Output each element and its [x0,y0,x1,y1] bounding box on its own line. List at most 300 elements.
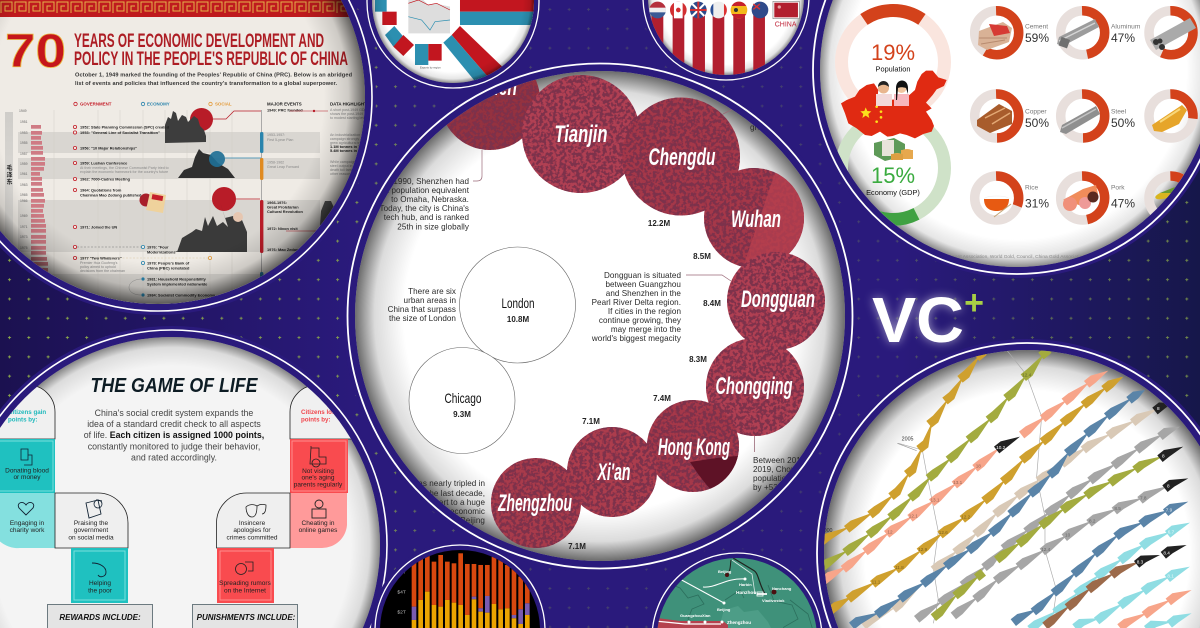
left leader column: 毛 [6,164,13,172]
small caption: Exports by region [420,65,441,69]
note: Dongguan: If cities in the region [608,307,681,316]
grey timeline bands [18,132,320,314]
column headings: SOCIAL [215,102,232,106]
left leader column: 东 [6,178,13,186]
year labels: 1966 [20,199,28,203]
axis labels: $2T [397,609,406,615]
note: Dongguan: continue growing, they [599,316,682,325]
place labels: Xian [702,613,711,618]
place labels: Vladivostok [762,598,785,603]
note: Zhengzhou: the last decade, [427,489,485,498]
left leader column [5,112,13,245]
population values: 12.2M [648,219,670,228]
note: Chongqing [753,436,821,492]
note: Zhengzhou: thanks in part to a huge [399,498,485,507]
logo: VC+: + [964,284,984,322]
square: donating blood: or money [13,474,41,481]
government events: decisions from the chairman [80,269,125,273]
city: Zhengzhou [491,458,581,548]
circle: Chicago: Chicago [444,390,482,406]
square: cheating online [290,493,347,548]
darts: black [994,402,1188,568]
value labels on black darts: 10.2 [996,445,1006,450]
economy events: 1984: Socialist Commodity Economy [147,292,216,298]
city: Dongguan [727,252,825,350]
darts: olive lower [931,456,1163,621]
intro text: October 1, 1949 marked the founding of the Peoples' Republic of China (PRC). Below is an abridged [75,72,353,78]
year labels: 1951 [20,120,28,124]
column headings: MAJOR EVENTS [267,102,302,106]
note: Zhengzhou: The economy has nearly tripled in [362,479,485,488]
note: Shenzhen: In 1990, Shenzhen had [384,177,469,186]
commodity labels: Copper [1025,108,1047,116]
gain header square: points by: [8,416,38,424]
column headings: DATA HIGHLIGHTS [330,102,370,106]
data highlights: A short post-1949 GDP data [330,108,375,112]
red bars [652,10,765,80]
note: Chengdu: greater [750,123,776,132]
year label 2005: 2005 [902,437,914,443]
city: Tianjin [522,75,640,193]
major events: Great Leap Forward [267,165,299,169]
note: Chongqing: by +53% [753,483,785,492]
square: helping the poor: the poor [88,588,113,594]
commodity labels: 47% [1111,196,1135,210]
commodity labels: 59% [1025,31,1049,45]
note: six urban areas: urban areas in [404,296,456,305]
place labels: Harbin [739,582,752,587]
place labels: Zhengzhou [727,620,751,625]
place labels: Beijing [717,607,731,612]
purple segments [412,596,530,624]
icon: steel [1060,106,1100,134]
year labels: 1959 [20,162,28,166]
darts: tan [861,408,1158,628]
population values: 7.4M [653,394,671,403]
value labels on black darts: 8.3 [1137,559,1144,564]
lose header square: points by: [301,416,331,424]
note: Dongguan: world's biggest megacity [591,334,682,343]
major events: 1949: PRC founded [267,108,303,112]
value labels: 12.6 [939,530,948,535]
flag: China: CHINA [775,22,797,29]
government events: Chairman Mao Zedong published [80,192,142,198]
population values: 7.1M [582,417,600,426]
major events: 1953-1957: [267,133,285,137]
donut: population 19%: Population [876,64,910,74]
government events: 1971: Joined the UN [80,224,117,230]
data highlights: death toll famine [330,168,356,172]
darts: gold [817,333,997,546]
icon: copper [977,104,1012,133]
panel: trade blocks preview [364,0,542,91]
major events: First 5-year Plan [267,138,293,142]
year labels: 1973 [20,235,28,239]
intro paragraph [84,408,264,462]
year labels: 1969 [20,214,28,218]
darts: grey [914,427,1180,623]
donut: economy 15% [838,126,951,226]
value labels: 8.5 [1114,506,1121,511]
major events: 1958-1962 [267,160,284,164]
axis labels: $6T [397,569,406,575]
square: charity work: charity work [10,527,45,534]
line chart [408,0,450,33]
note: six urban areas: the size of London [389,314,456,323]
heading: YEARS OF ECONOMIC DEVELOPMENT AND [74,31,324,52]
lighter region [716,606,776,628]
economy events: China (PBC) reinstated [147,266,190,270]
data highlights: to modest starting levels [330,116,369,120]
economy events: 1978: People's Bank of [147,260,190,266]
year labels: 1955 [20,141,28,145]
value labels: 7.8 [1140,495,1147,500]
rewards box: REWARDS INCLUDE: [59,613,141,622]
panel: green rail map [648,549,826,628]
city: Xi'an: Xi'an [596,459,630,486]
square: charity work [0,493,55,548]
note: Shenzhen: 25th in size globally [397,222,470,232]
square: helping the poor [71,548,128,603]
value labels: 8.2 [1089,518,1096,523]
note: six urban areas [388,287,456,323]
panel: China share of world [809,0,1200,278]
commodity labels: Pork [1111,184,1125,192]
major events: Great Proletarian [267,204,299,210]
value labels on black darts: 8 [1162,454,1165,459]
population bars [31,125,48,272]
city: Dongguan: Dongguan [741,286,815,313]
square: insincere apologies: apologies for [233,527,271,534]
panel: city ranking [343,50,857,628]
donut: economy 15%: Economy (GDP) [866,188,920,197]
photo: revolution crowd [177,187,247,252]
year labels: 1949 [19,109,27,113]
board: citizens gain points [0,385,153,628]
square: helping the poor: Helping [89,580,111,587]
note: Chongqing: Between 2010 and [753,456,821,465]
intro paragraph: of life. Each citizen is assigned 1000 points, [84,430,264,440]
commodity labels: 50% [1025,116,1049,130]
year connectors [820,350,1057,623]
city: clipped lower circle [445,545,535,628]
semicircle [518,43,535,77]
data highlights: While campaign grew [330,160,365,164]
city: Chengdu [622,98,740,216]
circle: London: 10.8M [507,315,529,324]
population values [568,219,721,551]
data highlights: steel output in 1958 [330,164,361,168]
note: Shenzhen: Today, the city is China's [379,204,469,213]
darts: gold lower [827,377,1123,614]
data highlights: An industrialization [330,133,360,137]
shade [0,0,365,304]
intro paragraph: China's social credit system expands the [95,408,253,418]
value labels: 13.1 [953,480,963,485]
intro paragraph: idea of a standard credit check to all aspects [87,419,261,429]
panel: flags preview [640,0,812,83]
panel: black stacked bars [371,541,549,628]
value labels on black darts: 8.4 [1163,550,1170,555]
city: Wuhan: Wuhan [731,206,781,233]
city: Zhengzhou: Zhengzhou [497,490,572,517]
square: cheating online: online games [299,527,338,534]
punishments box [192,604,298,628]
economy events: 1981: Household Responsibility [147,276,207,282]
year labels: 1957 [20,152,28,156]
government events: 1964: Quotations from [80,188,122,192]
note: Shenzhen: a population equivalent [385,186,470,195]
icon: rice [984,196,1011,217]
city: Chongqing: Chongqing [716,373,793,400]
heading [74,34,348,65]
note: Shenzhen: tech hub, and is ranked [384,213,469,222]
square: insincere apologies: crimes committed [227,534,278,542]
government events: explain the economic framework for the country's future [80,170,168,174]
stations [688,573,776,624]
note: Dongguan: may merge into the [611,325,681,334]
red corridor [650,617,728,628]
government events: 1977 "Two Whatevers" [80,256,122,260]
heading: POLICY IN THE PEOPLE'S REPUBLIC OF CHINA [74,49,348,70]
heading: THE GAME OF LIFE [90,375,258,397]
board: citizens lose points [192,385,360,628]
axis labels [397,569,406,615]
square: not visiting parents: parents regularly [294,482,343,488]
flags row [649,2,768,18]
place labels: Hanzhou [736,590,756,596]
government events: 1956: "10 Major Relationships" [80,146,137,150]
government events: 1962: 7000-Cadres Meeting [80,176,131,182]
data highlights [290,108,364,175]
square: praising government: on social media [68,534,114,542]
decorative grid [54,110,232,274]
commodity labels: Cement [1025,24,1048,30]
value labels: 12.4 [1041,547,1051,552]
population values: 8.4M [703,299,721,308]
value labels: 18 [976,463,981,468]
city: Shenzhen: Shenzhen [443,74,517,101]
value labels: 6.7 [1168,529,1175,534]
punishments box: PUNISHMENTS INCLUDE: [197,613,296,622]
photo: tractor [178,149,235,178]
donut: population 19%: 19% [871,40,915,65]
commodity labels: 31% [1025,196,1049,210]
lose header square [290,385,360,439]
square: charity work: Engaging in [10,520,45,527]
icon: gold [1152,105,1187,132]
commodity labels [1025,24,1141,210]
commodity labels: Aluminum [1111,24,1141,30]
year label 2005 [897,437,917,451]
government events: policy aimed to uphold [80,265,116,269]
city: Xi'an [567,427,657,517]
year labels: 1971 [20,225,28,229]
year labels: 1965 [20,193,28,197]
blue and red blocks [375,0,442,65]
icon: corn [1155,187,1175,200]
value labels: 7.9 [1166,508,1173,513]
note: Zhengzhou: economic [450,507,485,516]
book: quotations [140,192,166,213]
intro text: list of events and policies that influenced the country's transformation to a global superpower. [75,81,337,87]
donut: population 19% [835,4,951,106]
data highlights: other reasons [330,172,352,176]
note: Dongguan: Dongguan is situated [604,271,681,280]
column headings: ECONOMY [147,102,170,106]
city: Shenzhen [440,50,540,150]
commodity labels: Steel [1111,108,1127,116]
circle: London [460,247,576,363]
square: spreading rumors: on the Internet [224,588,266,594]
year label 2000: 2000 [821,528,833,534]
donut: economy 15%: 15% [871,163,915,188]
square: cheating online: Cheating in [302,520,335,527]
economy events [129,244,216,298]
data highlights: grew agricultural trade [330,141,366,145]
place labels [680,569,792,625]
circle: Chicago: 9.3M [453,410,471,419]
flag: China [773,1,799,29]
note: Shenzhen: to Omaha, Nebraska. [391,195,469,204]
note: Dongguan: Pearl River Delta region. [592,298,681,307]
data highlights: campaign strongly [330,137,359,141]
population values: 7.1M [568,542,586,551]
data highlights: 5.4M tonnes in 1957 [330,148,367,153]
year labels: 1961 [20,172,28,176]
city: Hong Kong: Hong Kong [658,434,730,461]
major events: 1966-1976: [267,200,287,205]
square: not visiting parents: Not visiting [302,468,334,475]
darts: brown [1042,562,1140,628]
icon: cement [978,22,1012,50]
icon: money and coins [874,138,913,161]
title: 70: 70 [5,24,66,77]
circle: Chicago [409,348,515,454]
note: Dongguan: and Shenzhen in the [606,289,681,298]
value labels: 8.1 [1167,574,1174,579]
icon: pipes [1150,18,1196,50]
economy events: System implemented nationwide [147,282,208,286]
photo: Mao and crowd [165,108,213,143]
year labels: 1953 [20,131,28,135]
province borders [660,580,814,628]
city: Chengdu: Chengdu [648,144,716,171]
year labels: 1963 [20,183,28,187]
darts: salmon [821,371,1192,628]
icon: man and woman [876,80,909,106]
value labels: 12.1 [909,513,918,518]
population values: 8.3M [689,355,707,364]
icon: pork [1063,185,1098,211]
year labels: 1975 [20,246,28,250]
value labels: 12.2 [961,514,971,519]
population values: 8.5M [693,252,711,261]
major events: 1972: Nixon visit [267,226,298,231]
commodity labels: 50% [1111,116,1135,130]
wide bars [443,0,537,87]
note: Chongqing: 2019, Chongqing's [753,465,821,474]
value labels [872,373,1175,584]
note: Dongguan: between Guangzhou [605,280,681,289]
square: praising government [55,493,128,548]
timeline axis [213,110,264,277]
commodity labels: 47% [1111,31,1135,45]
value labels: 10 [1065,533,1071,538]
note: Dongguan [591,271,731,343]
square: not visiting parents [290,439,348,493]
government events: Premier Hua Guofeng's [80,261,118,265]
decorative red key band [0,0,380,17]
lose header square: Citizens lose [301,409,339,416]
square: donating blood: Donating blood [5,468,49,474]
government events [73,124,212,273]
square: praising government: government [74,527,108,534]
note: six urban areas: China that surpass [388,305,456,314]
value labels: 12 [887,529,893,534]
note: Chengdu [723,108,776,132]
orange bars [412,553,530,615]
gain header square [0,385,55,439]
circle: London: London [502,295,534,311]
data highlights: 1.1M tonnes in 1952 [330,144,368,149]
government events: 1959: Lushan Conference [80,160,128,166]
commodity labels: Rice [1025,184,1039,192]
intro paragraph: and rated accordingly. [131,452,217,462]
major events: Cultural Revolution [267,209,304,214]
darts: teal [1027,523,1192,628]
logo: VC+: VC [872,284,964,356]
data highlights: shows the post-1949 economy [330,112,379,116]
economy events: Modernizations" [147,250,178,254]
square: spreading rumors [217,548,274,603]
commodity donuts [975,11,1193,220]
government events: 1953: "General Line of Socialist Transition" [80,130,160,135]
note: six urban areas: There are six [408,287,456,296]
value labels on black darts: 8 [1167,484,1170,489]
panel: trade darts chart [813,332,1200,628]
square: insincere apologies: Insincere [239,520,266,527]
intro text [75,72,353,87]
icon: aluminum [1057,19,1099,48]
note: Zhengzhou [362,479,485,525]
value labels: 13.1 [930,498,940,503]
square: praising government: Praising the [74,520,109,527]
left leader column: 泽 [6,171,13,179]
note: Shenzhen [379,150,482,232]
value labels: 11.8 [895,565,904,570]
city: Chongqing [706,338,804,436]
square: not visiting parents: one's aging [301,474,335,482]
panel: 70 years timeline [0,0,380,320]
axis labels: $4T [397,589,406,595]
intro paragraph: constantly monitored to judge their behavior, [88,442,260,452]
value labels on black darts [996,406,1170,564]
gain header square: Citizens gain [8,409,46,416]
city: Wuhan [704,168,808,272]
major events [267,108,337,252]
amber bars [412,592,530,628]
place labels: Guangzhou [680,613,703,618]
square: insincere apologies [216,493,290,548]
value labels: 11.1 [872,579,881,584]
column headings: GOVERNMENT [80,102,112,106]
logo: VC+: VC [872,284,964,356]
map: China with flag stars [841,71,947,138]
column headings [74,102,370,106]
note: Zhengzhou: link to Beijing [437,516,485,525]
note: Chongqing: population grew [753,474,811,483]
